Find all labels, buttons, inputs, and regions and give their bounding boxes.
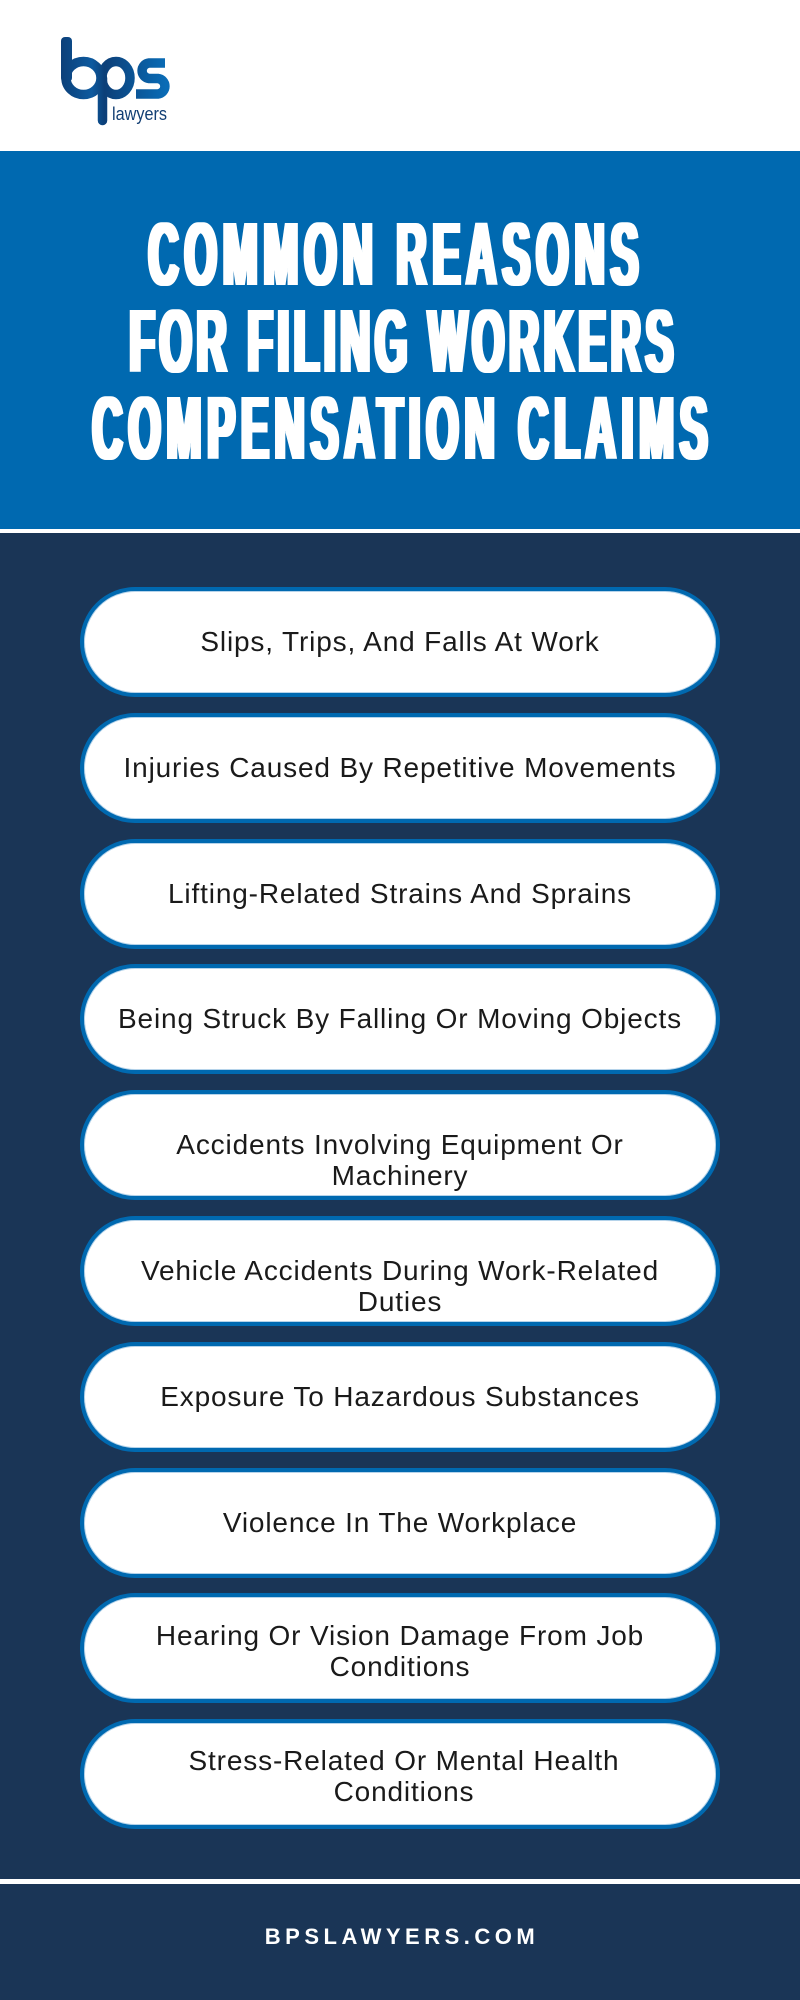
pill: struck by objects: Being Struck By Falling Or Moving Objects <box>118 1003 682 1034</box>
pill: repetitive movements <box>80 713 720 823</box>
pill: equipment: Accidents Involving Equipment Or <box>176 1129 624 1160</box>
pill: hearing or vision: Conditions <box>330 1651 470 1682</box>
pill: vehicle: Vehicle Accidents During Work-Related <box>141 1255 659 1286</box>
pill: stress: Conditions <box>334 1776 474 1807</box>
pill: struck by objects <box>80 964 720 1074</box>
pill: violence: Violence In The Workplace <box>223 1507 577 1538</box>
pill: slips <box>80 587 720 697</box>
pill: slips: Slips, Trips, And Falls At Work <box>200 626 600 657</box>
footer url: BPSLAWYERS.COM <box>265 1924 539 1949</box>
pill: equipment <box>80 1090 720 1200</box>
pill: hearing or vision: Hearing Or Vision Damage From Job <box>156 1620 644 1651</box>
pill: repetitive movements: Injuries Caused By Repetitive Movements <box>124 752 676 783</box>
pill: lifting: Lifting-Related Strains And Sprains <box>168 878 632 909</box>
pill: hearing or vision <box>80 1593 720 1703</box>
list panel: reasons <box>80 587 720 1829</box>
pill: lifting <box>80 839 720 949</box>
divider under title <box>0 529 800 533</box>
pill: stress <box>80 1719 720 1829</box>
header band with logo <box>0 0 800 151</box>
title: COMMON REASONS <box>148 204 638 304</box>
pill: vehicle: Duties <box>358 1286 442 1317</box>
title <box>92 204 708 478</box>
title: COMPENSATION CLAIMS <box>92 378 708 478</box>
title panel <box>0 151 800 529</box>
pill: hazardous: Exposure To Hazardous Substances <box>160 1381 640 1412</box>
pill: hazardous <box>80 1342 720 1452</box>
pill: equipment: Machinery <box>332 1160 468 1191</box>
divider above footer <box>0 1879 800 1884</box>
title: FOR FILING WORKERS <box>130 291 673 391</box>
pill: stress: Stress-Related Or Mental Health <box>189 1745 619 1776</box>
pill: vehicle <box>80 1216 720 1326</box>
icon: bps lawyers logo: lawyers <box>112 104 167 124</box>
icon: bps lawyers logo <box>61 37 170 126</box>
pill: violence <box>80 1468 720 1578</box>
